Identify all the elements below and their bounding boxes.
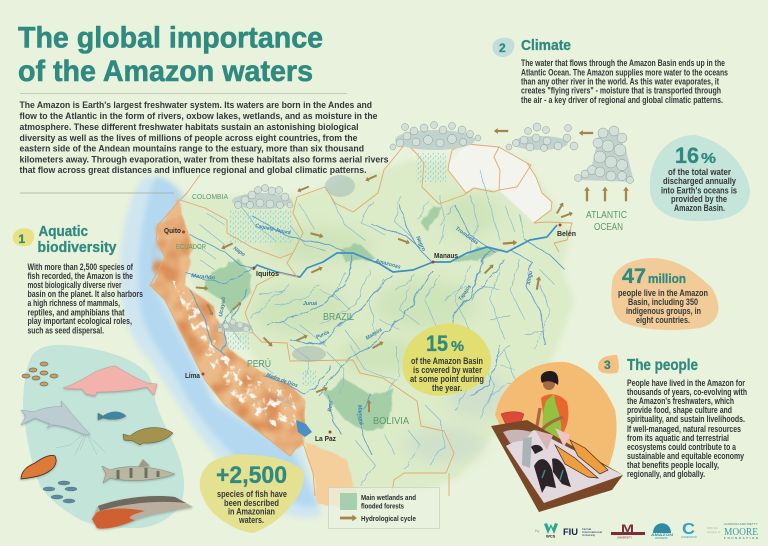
river labels: Mamoré — [356, 405, 364, 425]
intro text: diversity as well as the lives of millions of people across eight countries, from the — [20, 133, 358, 143]
atlantic ocean label — [586, 209, 627, 233]
pink river dolphin — [63, 366, 157, 396]
arapaima — [92, 496, 193, 529]
logo: FIU: Florida — [582, 527, 592, 531]
intro text: atmosphere. These different freshwater habitats sustain an astonishing biological — [20, 122, 358, 132]
legend — [328, 488, 440, 528]
land shading — [252, 195, 498, 373]
river labels: Tapajós — [458, 284, 473, 302]
cities: Lima — [185, 371, 201, 380]
stat: 16% of water: Amazon Basin. — [674, 203, 725, 213]
catfish — [21, 401, 105, 455]
country labels: PERÚ — [247, 357, 271, 370]
river labels: Marañón — [191, 273, 216, 282]
logo: Mississippi State — [611, 523, 645, 540]
cloud: colombia — [232, 184, 293, 209]
number badge 1: 1 — [18, 232, 26, 246]
logo: Amazon Waters: WATERS — [655, 536, 668, 540]
logo: FIU — [563, 527, 602, 537]
map of the Amazon basin — [120, 128, 629, 518]
country labels: COLOMBIA — [192, 192, 228, 201]
river labels: Xingu — [526, 270, 535, 286]
stat: +2,500 species: +2,500 — [216, 462, 287, 489]
cloud: guyana west — [390, 122, 481, 150]
logo: Moore Foundation — [724, 522, 758, 540]
stat: 47 million people: Basin, including 350 — [628, 297, 698, 307]
stat: 47 million people — [611, 258, 718, 330]
stat: 16% of water — [650, 135, 750, 221]
striped fish — [102, 459, 175, 483]
stat: 15% covered by water: of the Amazon Basin — [411, 356, 483, 366]
intro text: flow to the Atlantic in the form of rivers, oxbow lakes, wetlands, and as moisture in the — [20, 111, 378, 121]
number badge 3 — [598, 355, 619, 373]
title: The global importance — [18, 22, 323, 54]
intro text: The Amazon is Earth's largest freshwater system. Its waters are born in the Andes and — [20, 100, 372, 110]
amazon main river — [253, 225, 557, 277]
cloud: madre de dios — [292, 346, 326, 362]
intro text: eastern side of the Andean mountains range to the estuary, more than six thousand — [20, 144, 364, 154]
stat: +2,500 species: species of fish have — [217, 489, 287, 499]
cloud: guyana east — [506, 123, 578, 152]
atlantic ocean label: OCEAN — [594, 221, 623, 233]
orange banded fish — [21, 455, 56, 479]
stat: 15% covered by water: at some point during — [410, 374, 484, 384]
number badge 3: 3 — [604, 358, 611, 372]
stat: +2,500 species: been described — [224, 498, 279, 508]
cities — [164, 224, 576, 443]
andes southern foothills — [302, 440, 358, 506]
country labels: BOLIVIA — [373, 415, 409, 427]
country labels: ECUADOR — [176, 242, 206, 251]
stat: 16% of water: % — [701, 150, 716, 167]
cities: Belén — [557, 229, 576, 238]
number badge 2: 2 — [499, 41, 506, 55]
logo: Mississippi State: UNIVERSITY — [617, 536, 632, 540]
andes — [150, 198, 306, 456]
body text: the Amazon's freshwaters, which — [627, 396, 734, 406]
river labels: Napo — [232, 246, 246, 258]
support note — [707, 526, 721, 534]
country labels: BRAZIL — [323, 311, 354, 323]
wetland swatch — [340, 493, 357, 510]
title — [18, 22, 323, 88]
logos — [535, 521, 758, 540]
stat: 16% of water: provided by the — [671, 194, 727, 204]
logo: Amazon Waters: AMAZON — [651, 532, 673, 537]
blob — [23, 345, 184, 528]
legend: Hydrological cycle — [361, 514, 416, 523]
stat: 15% covered by water: % — [451, 338, 464, 355]
woman — [536, 371, 568, 450]
cities: Iquitos — [256, 269, 279, 278]
river labels: Ucayali — [218, 296, 228, 317]
body text: reptiles, and amphibians that — [28, 308, 124, 318]
basin borders — [150, 143, 572, 496]
logo: WCS — [535, 523, 558, 538]
body text: that benefits people locally, — [627, 460, 719, 470]
logo: C: CONSERVATION — [681, 535, 697, 539]
number badge 2 — [492, 38, 514, 57]
yellow perch — [123, 428, 173, 445]
body text: most biologically diverse river — [28, 280, 122, 290]
stat: 47 million people: million — [648, 271, 686, 286]
river labels — [191, 223, 535, 425]
atlantic ocean label: ATLANTIC — [586, 209, 627, 221]
section 3: the people — [598, 355, 747, 479]
heading — [38, 223, 117, 256]
heading: The people — [627, 357, 698, 374]
ocean glow — [120, 175, 322, 518]
heading: Aquatic — [38, 223, 88, 240]
stat: 16% of water: of the total water — [668, 167, 732, 177]
guyana highlands — [448, 144, 552, 223]
andes snow — [172, 280, 300, 432]
intro text — [20, 100, 388, 175]
stat: 16% of water: 16 — [675, 143, 699, 168]
cities: Manaus — [434, 251, 458, 260]
river labels: Negro — [414, 235, 427, 253]
support note: support of — [707, 530, 721, 534]
river labels: Beni — [327, 400, 335, 412]
river labels: Amazonas — [374, 258, 401, 271]
river labels: Madre de Dios — [265, 372, 298, 389]
misty south east shading — [405, 371, 508, 463]
logo: Amazon Waters — [651, 523, 673, 540]
cloud: north — [325, 175, 355, 197]
cloud: atlantic cumulus — [574, 126, 634, 184]
body text — [521, 58, 728, 105]
body text: creates "flying rivers" - moisture that is transported through — [521, 86, 721, 96]
small blue fish school — [43, 481, 77, 503]
ocean: Pacific — [139, 176, 318, 507]
body text: such as seed dispersal. — [28, 326, 104, 336]
intro text: that flow across great distances and influence regional and global climatic patterns. — [20, 165, 366, 175]
river labels: Madeira — [365, 327, 383, 342]
divider — [20, 92, 347, 94]
body text: provide food, shape culture and — [627, 405, 732, 415]
stat: +2,500 species — [200, 454, 304, 533]
cities: La Paz — [315, 434, 336, 443]
lake titicaca — [296, 420, 312, 437]
stat: 47 million people: people live in the Amazon — [618, 288, 708, 298]
logo: Moore Foundation: FOUNDATION — [724, 536, 758, 540]
stat: 15% covered by water — [403, 323, 491, 396]
river labels: Caquetá-Japurá — [255, 223, 291, 236]
title: of the Amazon waters — [18, 55, 313, 88]
section 2: climate — [492, 37, 728, 105]
logo: C — [681, 521, 697, 539]
red bowl — [501, 412, 524, 427]
intro text: kilometers away. Through evaporation, water from these habitats also forms aerial rivers — [20, 154, 388, 164]
body text: basin on the planet. It also harbors — [28, 289, 143, 299]
stat: 15% covered by water: is covered by water — [413, 365, 482, 375]
school of small fish — [22, 362, 58, 386]
legend: flooded forests — [361, 502, 404, 510]
body text: than any other river in the world. As this water evaporates, it — [521, 76, 719, 86]
logo: FIU: International — [582, 530, 602, 534]
heading: biodiversity — [38, 239, 117, 256]
stat: 47 million people: eight countries. — [636, 315, 690, 325]
river labels: Trombetas — [454, 226, 479, 246]
stat: +2,500 species: in Amazonian — [228, 506, 275, 516]
logo: WCS: By — [535, 528, 540, 533]
stat: +2,500 species: waters. — [238, 515, 264, 525]
logo: WCS: WCS — [546, 534, 556, 538]
body text: play important ecological roles, — [28, 316, 132, 326]
basin land — [180, 150, 574, 500]
andes rust — [150, 215, 305, 456]
Hydrological cycle arrows — [196, 128, 629, 412]
cities: Quito — [164, 226, 181, 235]
stat: 16% of water: into Earth's oceans is — [661, 186, 737, 196]
body text — [28, 262, 143, 336]
logo: FIU: FIU — [563, 527, 578, 537]
stat: 15% covered by water: 15 — [426, 331, 448, 356]
logo: C: C — [682, 521, 695, 538]
stat: 47 million people: indigenous groups, in — [626, 306, 701, 316]
river labels: Purús — [315, 329, 331, 341]
river labels: Juruá — [303, 301, 317, 307]
body text: regionally, and globally. — [627, 469, 705, 479]
panel: fish market illustration — [491, 362, 623, 512]
section 1: aquatic biodiversity — [13, 223, 143, 336]
country labels — [176, 192, 409, 427]
body text: fish recorded, the Amazon is the — [28, 271, 133, 281]
orange blob — [495, 362, 617, 475]
cloud: peru — [216, 319, 253, 333]
main tributaries — [185, 205, 565, 455]
blue fish — [98, 412, 126, 420]
logo: FIU: University — [582, 533, 596, 537]
panel: fish — [21, 345, 193, 529]
wetlands — [205, 205, 505, 432]
logo: Moore Foundation: MOORE — [724, 527, 758, 538]
body text: a high richness of mammals, — [28, 298, 120, 308]
fish on table — [522, 428, 608, 493]
support note: With the — [707, 526, 718, 530]
heading: Climate — [521, 37, 571, 54]
stat: 15% covered by water: the year. — [432, 383, 462, 393]
body text: from its aquatic and terrestrial — [627, 433, 729, 443]
table — [491, 420, 623, 512]
arrow swatch — [340, 515, 357, 521]
body text — [627, 378, 747, 479]
rain — [222, 153, 446, 386]
small tributaries — [195, 170, 555, 485]
logo: Mississippi State: M — [621, 523, 634, 535]
clouds — [216, 122, 634, 362]
body text: ecosystems could contribute to a — [627, 442, 736, 452]
logo: Moore Foundation: GORDON AND BETTY — [724, 522, 758, 526]
body text: the air - a key driver of regional and global climatic patterns. — [521, 95, 723, 105]
body text: With more than 2,500 species of — [28, 262, 134, 272]
stat: 16% of water: discharged annually — [663, 176, 736, 186]
legend: Main wetlands and — [361, 493, 416, 502]
stat: 47 million people: 47 — [622, 265, 646, 288]
